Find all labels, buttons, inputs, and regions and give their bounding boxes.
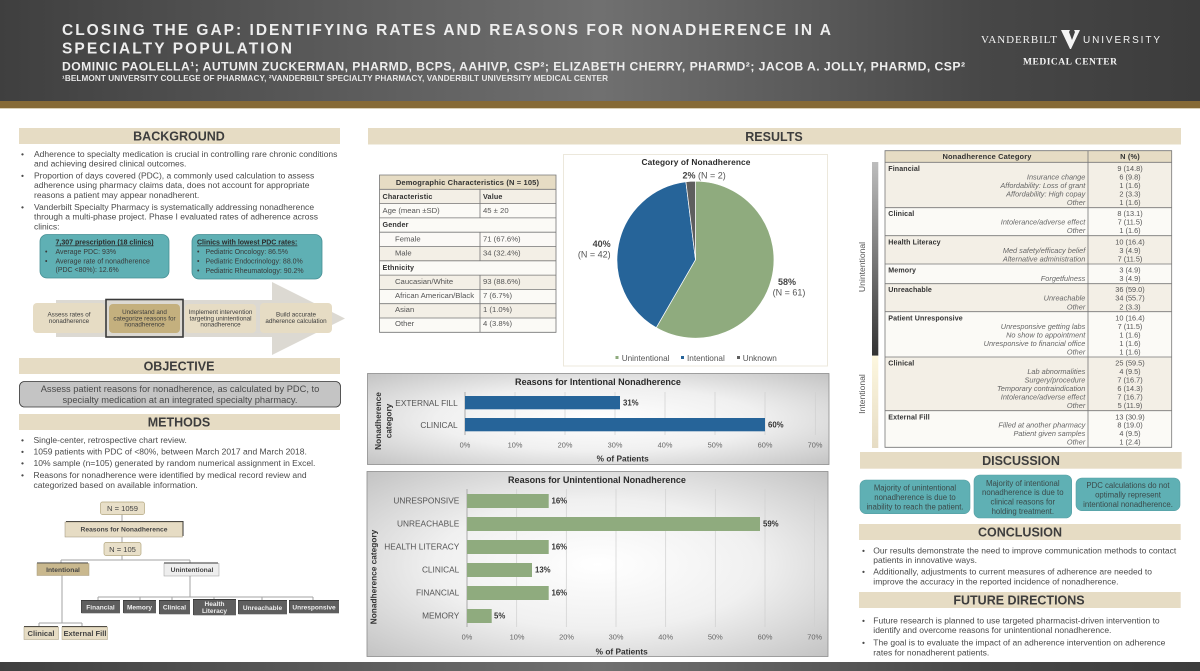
step 3: targeting unintentional [190, 316, 251, 322]
heading: objective: OBJECTIVE [144, 360, 214, 374]
table: demographic characteristics: Value [483, 192, 503, 201]
header banner [0, 0, 1200, 109]
rows: unreachable: Other [1067, 302, 1086, 311]
rows: memory: Memory [888, 267, 916, 275]
rows: clinical (intentional): Clinical [888, 359, 914, 367]
rows: clinical (intentional) [888, 358, 1145, 410]
rows: memory: 3 (4.9) [1119, 266, 1141, 275]
table: demographic characteristics [380, 175, 556, 332]
table: demographic characteristics: 34 (32.4%) [483, 248, 521, 258]
rows: clinical [888, 209, 1143, 235]
bar chart: reasons for unintentional nonadherence: 5% [494, 612, 505, 621]
bar chart: reasons for unintentional nonadherence: UNRESPONSIVE [393, 496, 460, 506]
panel: discussion [860, 452, 1182, 518]
bar chart: reasons for unintentional nonadherence: 20% [559, 632, 574, 641]
bar chart: reasons for unintentional nonadherence: 16% [552, 543, 567, 552]
rows: clinical (intentional): 7 (16.7) [1117, 376, 1143, 385]
heading: background: BACKGROUND [133, 130, 225, 144]
rows: clinical (intentional): 5 (11.9) [1118, 401, 1142, 410]
pie labels: 58% [778, 277, 796, 287]
table: demographic characteristics: 7 (6.7%) [483, 291, 512, 300]
rows: clinical: 8 (13.1) [1117, 209, 1143, 218]
Clinical (intentional) [24, 626, 58, 640]
rows: patient unresponsive: No show to appointment [1006, 330, 1086, 339]
background bullet text: • [21, 149, 24, 159]
bar chart: reasons for unintentional nonadherence: HEALTH LITERACY [384, 542, 460, 552]
callout: intentional majority: holding treatment. [992, 507, 1054, 516]
bar chart: reasons for intentional nonadherence: 0% [460, 441, 471, 450]
pie labels: (N = 61) [773, 288, 805, 298]
pie labels: 40% [593, 239, 611, 249]
methods bullet text: • [21, 447, 24, 457]
rows: patient unresponsive: Patient Unresponsive [888, 314, 963, 322]
side bar: unintentional / intentional: Intentional [857, 374, 867, 414]
pie legend: Unintentional [622, 354, 670, 363]
callout: unintentional majority [860, 480, 970, 514]
conclusion bullet text: • [862, 545, 865, 555]
bar chart: reasons for unintentional nonadherence: 13% [535, 566, 551, 575]
rows: clinical (intentional): 25 (59.5) [1115, 358, 1145, 367]
N = 105: N = 105 [109, 545, 136, 554]
rows: unreachable: 2 (3.3) [1119, 302, 1141, 311]
Health Literacy: Health [204, 601, 225, 608]
rows: external fill: 4 (9.5) [1119, 429, 1141, 438]
Financial [81, 600, 120, 613]
title [62, 22, 831, 58]
heading: conclusion [859, 524, 1181, 540]
Clinical [159, 600, 190, 614]
callout: PDC limitation [1076, 478, 1180, 511]
pie slices [617, 181, 774, 338]
Reasons for Nonadherence [65, 521, 184, 537]
bar chart: reasons for intentional nonadherence: 60% [768, 421, 784, 430]
rows: clinical: Clinical [888, 210, 914, 218]
bar chart: reasons for unintentional nonadherence: 30% [609, 632, 624, 641]
rows: financial: 9 (14.8) [1117, 164, 1143, 173]
callout: lowest PDC clinics: Clinics with lowest PDC rates: [197, 240, 297, 246]
methods bullet text: Reasons for nonadherence were identified by medical record review and [34, 470, 307, 480]
conclusion bullet text: • [862, 567, 865, 577]
rows: clinical (intentional): Temporary contraindication [997, 384, 1085, 393]
table: demographic characteristics: Caucasian/White [395, 277, 453, 286]
rows: unreachable [888, 285, 1145, 311]
table: demographic characteristics: 71 (67.6%) [483, 234, 521, 243]
panel: future directions [859, 592, 1181, 657]
rows: external fill: External Fill [888, 413, 930, 421]
arrow: multi-phase process [33, 282, 345, 355]
future directions bullet text: identify and overcome reasons for unintentional nonadherence. [873, 625, 1111, 635]
step 2 highlighted: Understand and [122, 309, 167, 316]
conclusion bullet text: patients in innovative ways. [873, 555, 977, 565]
conclusion bullet text: Our results demonstrate the need to improve communication methods to contact [873, 545, 1177, 555]
bar chart: reasons for intentional nonadherence: 20% [558, 441, 573, 450]
rows: memory: Forgetfulness [1041, 274, 1086, 283]
Reasons for Nonadherence: Reasons for Nonadherence [81, 526, 168, 534]
callout: prescriptions: 7,307 prescription (18 clinics) [56, 240, 154, 246]
Health Literacy: Literacy [202, 608, 227, 615]
step 4: Build accurate [276, 312, 316, 318]
table: nonadherence category: N (%) [1120, 152, 1140, 161]
Unreachable [238, 600, 287, 614]
Clinical: Clinical [163, 604, 186, 612]
methods bullet text: Single-center, retrospective chart review. [34, 435, 187, 445]
background bullet text: reasons a patient may appear nonadherent. [34, 190, 199, 200]
table: demographic characteristics: African American/Black [395, 291, 474, 300]
bar chart: reasons for unintentional nonadherence: FINANCIAL [416, 588, 460, 598]
rows: external fill: Patient given samples [1013, 429, 1086, 438]
callout: prescriptions: Average rate of nonadherence [56, 258, 150, 266]
heading: results [368, 128, 1181, 144]
methods bullet text: 10% sample (n=105) generated by random numerical assignment in Excel. [34, 458, 315, 468]
bars [467, 494, 760, 623]
footer band [0, 662, 1200, 671]
bar chart: reasons for unintentional nonadherence [367, 472, 828, 656]
heading: methods: METHODS [148, 416, 210, 430]
bar chart: reasons for intentional nonadherence: CLINICAL [420, 420, 458, 430]
Financial: Financial [86, 604, 115, 612]
background bullet text: through a multi-phase project. Phase I evaluated rates of adherence across [34, 212, 318, 222]
heading: methods [19, 414, 340, 430]
rows: financial: Affordability: Loss of grant [999, 181, 1086, 190]
flow diagram [24, 502, 339, 640]
rows: clinical (intentional): 6 (14.3) [1117, 384, 1143, 393]
rows: external fill: 1 (2.4) [1119, 438, 1141, 447]
bar chart: reasons for intentional nonadherence: % of Patients [597, 454, 649, 464]
heading: results: RESULTS [745, 130, 803, 144]
pie labels [578, 170, 805, 298]
Memory [123, 600, 156, 613]
bars [465, 396, 765, 431]
bar chart: reasons for unintentional nonadherence: 40% [658, 632, 674, 641]
callout: intentional majority: Majority of intentional [986, 479, 1060, 488]
callout: prescriptions: (PDC <80%): 12.6% [56, 267, 119, 274]
Intentional: Intentional [46, 567, 80, 574]
future directions bullet text: • [862, 637, 865, 647]
rows: financial: 6 (9.8) [1119, 172, 1141, 181]
table: demographic characteristics: Demographic Characteristics (N = 105) [396, 178, 540, 187]
future directions bullet text: • [862, 616, 865, 626]
callout: intentional majority: nonadherence is due to [982, 488, 1064, 497]
callout: lowest PDC clinics: • [197, 258, 200, 266]
rows: external fill: 13 (30.9) [1115, 412, 1145, 421]
rows: patient unresponsive: 7 (11.5) [1118, 322, 1142, 331]
pie chart: category of nonadherence [564, 154, 828, 366]
table: demographic characteristics: 1 (1.0%) [483, 305, 512, 314]
methods bullet text [21, 435, 315, 490]
rows: financial [888, 164, 1143, 207]
affiliations: ¹BELMONT UNIVERSITY COLLEGE OF PHARMACY, ²VANDERBILT SPECIALTY PHARMACY, VANDERBILT UNIVERSITY MEDICAL CENTER [62, 74, 608, 83]
table: demographic characteristics: 93 (88.6%) [483, 277, 521, 286]
N = 1059 [100, 502, 144, 514]
bar chart: reasons for intentional nonadherence: Nonadherence [373, 392, 383, 450]
methods bullet text: • [21, 470, 24, 480]
table: demographic characteristics: Characteristic [382, 192, 433, 201]
rows: health literacy [888, 237, 1145, 264]
bar chart: reasons for unintentional nonadherence: 16% [552, 589, 567, 598]
objective statement [20, 382, 340, 407]
Memory: Memory [127, 604, 152, 612]
rows: patient unresponsive: Unresponsive to financial office [984, 339, 1085, 348]
bar chart: reasons for intentional nonadherence: EXTERNAL FILL [395, 398, 458, 408]
bar chart: reasons for unintentional nonadherence: 50% [708, 632, 723, 641]
rows: clinical (intentional): 4 (9.5) [1119, 367, 1141, 376]
callout: lowest PDC clinics: Pediatric Oncology: 86.5% [206, 249, 288, 256]
rows: health literacy: 3 (4.9) [1119, 246, 1141, 255]
background bullet text: • [21, 202, 24, 212]
rows: external fill: Other [1067, 438, 1086, 447]
side bar: unintentional / intentional [857, 162, 878, 448]
rows: financial: 2 (3.3) [1119, 189, 1141, 198]
bar chart: reasons for intentional nonadherence: 70% [808, 441, 823, 450]
panel: background [19, 128, 345, 355]
heading: future directions [859, 592, 1181, 608]
callout: prescriptions: • [45, 249, 48, 256]
rows: external fill: 8 (19.0) [1117, 421, 1143, 430]
rows: memory: 3 (4.9) [1119, 274, 1141, 283]
rows: clinical: Intolerance/adverse effect [1001, 217, 1086, 226]
rows: financial: Affordability: High copay [1005, 189, 1087, 198]
callout: unintentional majority: inability to reach the patient. [866, 502, 964, 512]
table: nonadherence category [857, 151, 1172, 448]
rows: patient unresponsive: 1 (1.6) [1119, 347, 1141, 356]
conclusion bullet text: Additionally, adjustments to current measures of adherence are needed to [873, 567, 1152, 577]
N = 105 [104, 542, 141, 556]
callout: lowest PDC clinics: • [197, 268, 200, 275]
title: SPECIALTY POPULATION [62, 40, 292, 58]
Unintentional: Unintentional [171, 567, 213, 574]
bar chart: reasons for unintentional nonadherence: 60% [758, 632, 773, 641]
bar chart: reasons for intentional nonadherence: 50% [708, 441, 723, 450]
title: CLOSING THE GAP: IDENTIFYING RATES AND REASONS FOR NONADHERENCE IN A [62, 22, 831, 39]
background bullet text [21, 149, 337, 232]
bar chart: reasons for intentional nonadherence: 60% [758, 441, 773, 450]
background bullet text: • [21, 170, 24, 180]
logo: Vanderbilt University Medical Center: VANDERBILT [981, 34, 1057, 46]
step 3: nonadherence [200, 322, 241, 328]
pie title: Category of Nonadherence [641, 157, 751, 167]
bar chart: reasons for unintentional nonadherence: CLINICAL [422, 565, 460, 575]
methods bullet text: 1059 patients with PDC of <80%, between March 2017 and March 2018. [34, 447, 307, 457]
background bullet text: clinics: [34, 222, 60, 232]
background bullet text: Proportion of days covered (PDC), a commonly used calculation to assess [34, 170, 314, 180]
rows: financial: Other [1067, 198, 1086, 207]
rows: unreachable: 36 (59.0) [1115, 285, 1145, 294]
rows: patient unresponsive: 1 (1.6) [1119, 339, 1141, 348]
rows: unreachable: Unreachable [888, 286, 932, 294]
table: demographic characteristics: Asian [395, 305, 414, 314]
rows: clinical: Other [1067, 226, 1086, 235]
background bullet text: Vanderbilt Specialty Pharmacy is systematically addressing nonadherence [34, 202, 314, 212]
callout: PDC limitation: intentional nonadherence. [1083, 500, 1173, 509]
bar chart: reasons for unintentional nonadherence: MEMORY [422, 611, 460, 621]
bar chart: reasons for intentional nonadherence: 10% [508, 441, 523, 450]
table: demographic characteristics: Female [395, 234, 421, 243]
future directions bullet text: rates for nonadherent patients. [873, 647, 989, 657]
rows: external fill [888, 412, 1145, 447]
pie labels: (N = 42) [578, 250, 611, 260]
rows: external fill: Filled at another pharmacy [998, 421, 1087, 430]
callout: lowest PDC clinics: Pediatric Endocrinology: 88.0% [206, 258, 303, 266]
table: demographic characteristics: Age (mean ±SD) [382, 206, 440, 215]
callout: prescriptions: Average PDC: 93% [56, 249, 116, 256]
authors: DOMINIC PAOLELLA¹; AUTUMN ZUCKERMAN, PHARMD, BCPS, AAHIVP, CSP²; ELIZABETH CHERRY, PHARMD²; JACOB A. JOLLY, PHARMD, CSP² [62, 60, 965, 74]
table: demographic characteristics: Ethnicity [382, 263, 414, 272]
step 3: Implement intervention [189, 309, 253, 316]
bar chart: reasons for intentional nonadherence: category [384, 403, 394, 438]
pie legend [616, 354, 777, 363]
rows: unreachable: Unreachable [1044, 294, 1085, 303]
bar chart: reasons for unintentional nonadherence: 70% [807, 632, 823, 641]
step 1 [33, 303, 105, 333]
callout: unintentional majority: nonadherence is due to [874, 493, 956, 502]
rows: health literacy: 10 (16.4) [1115, 237, 1145, 246]
table: nonadherence category: Nonadherence Category [942, 152, 1032, 161]
rows: health literacy: Health Literacy [888, 238, 941, 246]
heading: objective [19, 358, 340, 374]
methods bullet text: • [21, 458, 24, 468]
table: demographic characteristics: 4 (3.8%) [483, 319, 512, 328]
Unresponsive: Unresponsive [292, 604, 336, 612]
future directions bullet text: Future research is planned to use targeted pharmacist-driven intervention to [873, 616, 1160, 626]
rows: clinical (intentional): Lab abnormalities [1027, 367, 1086, 376]
pie legend: Intentional [687, 354, 725, 363]
callout: prescriptions: • [45, 258, 48, 266]
step 4: adherence calculation [265, 318, 327, 325]
bar chart: reasons for intentional nonadherence: Reasons for Intentional Nonadherence [515, 377, 681, 387]
rows: clinical: 7 (11.5) [1118, 217, 1142, 226]
bar chart: reasons for unintentional nonadherence: 10% [510, 632, 525, 641]
heading: discussion: DISCUSSION [982, 454, 1060, 468]
bar chart: reasons for unintentional nonadherence: 59% [763, 520, 779, 529]
pie labels: 2% (N = 2) [682, 170, 726, 180]
heading: background [19, 128, 340, 144]
Unresponsive [289, 600, 339, 613]
panel: conclusion [859, 524, 1181, 587]
bar chart: reasons for unintentional nonadherence: 16% [552, 497, 567, 506]
callout: unintentional majority: Majority of unintentional [874, 484, 956, 492]
External Fill [62, 626, 108, 640]
callout: PDC limitation: optimally represent [1095, 490, 1162, 500]
rows: health literacy: Med safety/efficacy belief [1003, 246, 1086, 255]
rows: clinical (intentional): Other [1067, 401, 1086, 410]
panel: objective [19, 358, 340, 407]
bar chart: reasons for intentional nonadherence [368, 374, 829, 464]
conclusion bullet text: improve the accuracy in the reported incidence of nonadherence. [873, 577, 1119, 587]
rows: health literacy: Alternative administration [1002, 254, 1085, 264]
rows: clinical (intentional): 7 (16.7) [1117, 393, 1143, 402]
step 1: nonadherence [49, 318, 90, 325]
callout: intentional majority: clinical reasons for [991, 498, 1055, 506]
future directions bullet text [862, 616, 1166, 657]
bar chart: reasons for unintentional nonadherence: Reasons for Unintentional Nonadherence [508, 475, 686, 485]
step 2 highlighted: categorize reasons for [113, 316, 176, 322]
rows: health literacy: 7 (11.5) [1118, 254, 1142, 264]
step 2 highlighted: nonadherence [124, 322, 165, 328]
rows: clinical (intentional): Intolerance/adverse effect [1001, 393, 1086, 402]
callout: intentional majority [974, 475, 1072, 518]
Unreachable: Unreachable [243, 605, 282, 612]
External Fill: External Fill [63, 629, 107, 638]
heading: discussion [860, 452, 1182, 469]
rows: patient unresponsive: Other [1067, 347, 1086, 356]
callout: lowest PDC clinics: • [197, 249, 200, 256]
objective statement: specialty medication at an integrated specialty pharmacy. [63, 395, 297, 405]
rows: patient unresponsive [888, 313, 1145, 356]
table: demographic characteristics: Gender [382, 220, 409, 229]
callout: PDC limitation: PDC calculations do not [1086, 481, 1170, 490]
bar chart: reasons for unintentional nonadherence: 0% [462, 632, 473, 641]
table: demographic characteristics: Other [395, 319, 415, 328]
rows: patient unresponsive: 10 (16.4) [1115, 313, 1145, 322]
logo: Vanderbilt University Medical Center: MEDICAL CENTER [1023, 58, 1117, 68]
rows: patient unresponsive: 1 (1.6) [1119, 330, 1141, 339]
Health Literacy [193, 599, 236, 615]
rows: clinical (intentional): Surgery/procedure [1024, 376, 1085, 385]
future directions bullet text: The goal is to evaluate the impact of an adherence intervention on adherence [873, 637, 1166, 647]
rows: financial: Insurance change [1027, 172, 1085, 181]
Unintentional [164, 562, 219, 576]
Clinical (intentional): Clinical [27, 629, 55, 638]
rows: memory [888, 266, 1141, 283]
side bar: unintentional / intentional: Unintentional [857, 242, 867, 292]
callout: lowest PDC clinics: Pediatric Rheumatology: 90.2% [206, 268, 304, 275]
bar chart: reasons for intentional nonadherence: 30% [608, 441, 623, 450]
N = 1059: N = 1059 [107, 504, 138, 513]
table: demographic characteristics: Male [395, 248, 412, 258]
pie legend: Unknown [743, 354, 777, 363]
bar chart: reasons for unintentional nonadherence: % of Patients [596, 646, 648, 656]
objective statement: Assess patient reasons for nonadherence, as calculated by PDC, to [41, 384, 319, 394]
background bullet text: and achieving desired clinical outcomes. [34, 159, 186, 169]
step 2 highlighted [106, 300, 183, 337]
bar chart: reasons for unintentional nonadherence: Nonadherence category [368, 529, 378, 624]
rows: clinical: 1 (1.6) [1119, 226, 1141, 235]
bar chart: reasons for intentional nonadherence: 40% [658, 441, 673, 450]
conclusion bullet text [862, 545, 1177, 587]
logo: Vanderbilt University Medical Center [981, 30, 1160, 68]
rows: unreachable: 34 (55.7) [1115, 294, 1145, 303]
callout: prescriptions [40, 234, 169, 278]
step 1: Assess rates of [47, 312, 91, 318]
table: demographic characteristics: 45 ± 20 [483, 206, 509, 215]
bar chart: reasons for intentional nonadherence: 31% [623, 399, 639, 408]
logo: Vanderbilt University Medical Center: UNIVERSITY [1083, 35, 1160, 46]
step 4 [260, 303, 332, 333]
bar chart: reasons for unintentional nonadherence: UNREACHABLE [397, 519, 460, 529]
step 3 [185, 304, 256, 333]
panel: results [367, 128, 1181, 656]
background bullet text: adherence using pharmacy claims data, does not account for appropriate [34, 180, 310, 190]
background bullet text: Adherence to specialty medication is crucial in controlling rare chronic conditions [34, 149, 337, 159]
rows: financial: 1 (1.6) [1119, 198, 1141, 207]
methods bullet text: • [21, 435, 24, 445]
rows: financial: Financial [888, 165, 920, 173]
callout: lowest PDC clinics [192, 234, 322, 279]
rows: patient unresponsive: Unresponsive getting labs [1001, 322, 1086, 331]
heading: future directions: FUTURE DIRECTIONS [953, 594, 1085, 608]
panel: methods [19, 414, 340, 640]
heading: conclusion: CONCLUSION [978, 526, 1062, 540]
methods bullet text: categorized based on available information. [34, 480, 198, 490]
Intentional [37, 562, 89, 576]
rows: financial: 1 (1.6) [1119, 181, 1141, 190]
